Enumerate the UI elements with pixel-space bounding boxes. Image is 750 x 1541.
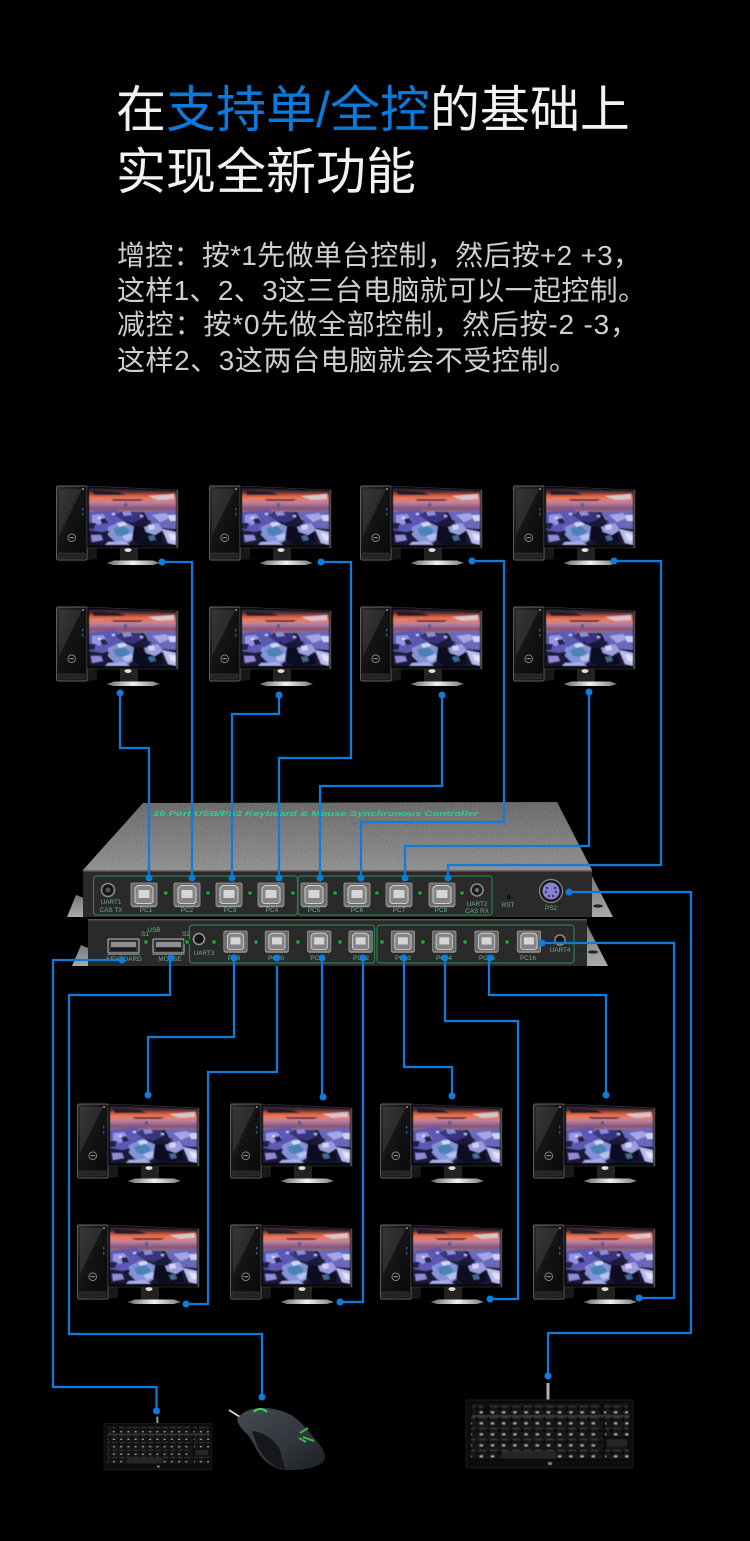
lower front panel: S2: [182, 931, 190, 938]
lower front panel: PC11: [310, 955, 326, 962]
computer: second row 3: [360, 607, 482, 686]
top cover: 16 Port USB/PS2 Keyboard & Mouse Synchronous Controller: [153, 809, 480, 818]
upper front panel: PC8: [435, 907, 448, 914]
mouse: [229, 1408, 325, 1470]
connection: PC13 to computer: [400, 954, 456, 1100]
upper front panel: PC7: [393, 907, 406, 914]
lower front panel: KEYBOARD: [106, 956, 142, 963]
connection: second row computer 4 to PC7: [402, 688, 592, 882]
connection: top computer 4 to PC8: [444, 558, 661, 882]
lower front panel: PC9: [228, 955, 241, 962]
description text: 增控：按*1先做单台控制，然后按+2 +3，: [117, 240, 641, 271]
connection: USB keyboard port to small keyboard: [53, 956, 160, 1414]
lower front panel: PC14: [436, 955, 452, 962]
computer: fourth row 2: [230, 1225, 352, 1304]
lower front panel: MOUSE: [158, 956, 182, 963]
description text: 这样2、3这两台电脑就会不受控制。: [117, 345, 577, 376]
upper front panel: PC2: [181, 907, 194, 914]
top cover: [83, 802, 592, 870]
description text: 减控：按*0先做全部控制，然后按-2 -3，: [117, 309, 638, 340]
lower front panel: [88, 919, 587, 966]
connection: second row computer 1 to PC1: [116, 690, 152, 882]
computer: top row 4: [514, 486, 635, 565]
computer: third row 1: [78, 1104, 199, 1183]
connection: top computer 1 to PC2: [158, 558, 196, 882]
computer: second row 1: [56, 607, 178, 686]
title: 实现全新功能: [116, 144, 416, 200]
lower front panel: PC16: [520, 955, 536, 962]
upper front panel: UART2: [467, 901, 488, 908]
mounting ears: [67, 876, 613, 966]
connection: PC15 to computer: [486, 954, 610, 1098]
computer: fourth row 3: [380, 1225, 502, 1304]
computer: fourth row 1: [78, 1225, 199, 1304]
connection: PC11 to computer: [318, 954, 326, 1100]
lower front panel: UART4: [550, 947, 571, 954]
upper front panel: UART1: [101, 899, 122, 906]
title: 在支持单/全控的基础上: [116, 82, 630, 138]
upper front panel: PC3: [224, 907, 237, 914]
computer: top row 3: [360, 486, 482, 565]
computer: top row 1: [56, 486, 178, 565]
connection: top computer 2 to PC4: [276, 558, 351, 882]
computer: second row 2: [210, 607, 331, 686]
lower front panel: PC12: [353, 955, 369, 962]
KVM controller device: [53, 558, 691, 1470]
upper front panel: PC1: [140, 907, 153, 914]
title: [116, 82, 630, 200]
connection: PC10 to computer: [182, 954, 280, 1308]
description text: 这样1、2、3这三台电脑就可以一起控制。: [117, 275, 646, 306]
connection: top computer 3 to PC6: [358, 558, 504, 882]
connection: PC14 to computer: [442, 954, 518, 1302]
connection: PC16 to computer: [538, 940, 674, 1302]
computer: third row 3: [380, 1104, 502, 1183]
connection: second row computer 3 to PC5: [316, 692, 446, 882]
upper front panel: PC5: [308, 907, 321, 914]
connection: PC9 to computer: [144, 954, 238, 1098]
upper front panel: RST: [502, 902, 514, 909]
description text: [117, 240, 646, 376]
computer: fourth row 4: [534, 1225, 655, 1304]
lower front panel: USB: [147, 927, 161, 934]
upper front panel: CAS RX: [465, 908, 490, 915]
lower front panel: PC15: [479, 955, 495, 962]
computer: third row 2: [230, 1104, 352, 1183]
lower front panel: PC10: [268, 955, 284, 962]
upper front panel: PC4: [266, 907, 279, 914]
upper front panel: CAS TX: [100, 907, 123, 914]
keyboard: large: [466, 1383, 633, 1468]
upper front panel: PS2: [545, 905, 557, 912]
computer: top row 2: [210, 486, 331, 565]
connection: USB mouse port to mouse: [69, 954, 266, 1400]
upper front panel: PC6: [351, 907, 364, 914]
upper front panel: [83, 870, 592, 917]
lower front panel: S1: [141, 931, 149, 938]
keyboard: small: [104, 1417, 212, 1470]
computer: second row 4: [514, 607, 635, 686]
connection: second row computer 2 to PC3: [228, 692, 282, 882]
connection: PC12 to computer: [336, 954, 366, 1306]
lower front panel: UART3: [194, 950, 215, 957]
computer: third row 4: [534, 1104, 655, 1183]
connection: PS2 to large keyboard: [544, 888, 691, 1380]
lower front panel: PC13: [395, 955, 411, 962]
